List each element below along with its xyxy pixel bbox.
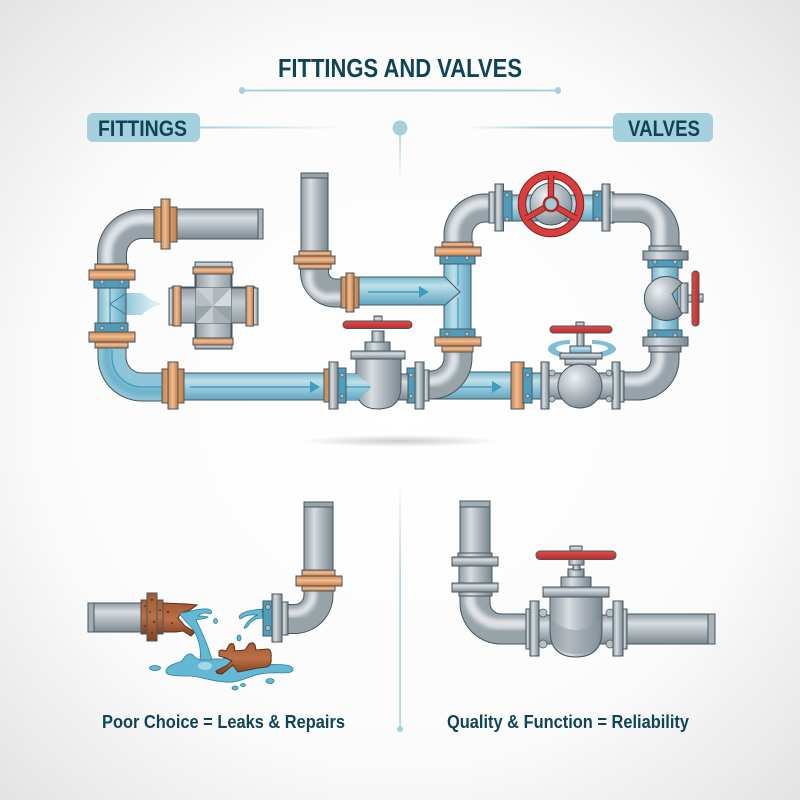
caption: quality and function: Quality & Function = Reliability	[447, 712, 689, 732]
fitting: lower-left blue elbow and pipe with flow arrow	[95, 342, 331, 409]
grey elbow with blue collar	[263, 502, 342, 642]
connector lines and center node	[200, 120, 613, 181]
water jets and falling stream	[180, 609, 263, 660]
main pipe diagram	[89, 173, 703, 409]
heading: fittings: FITTINGS	[98, 116, 187, 141]
illustration: quality valve assembly	[452, 501, 715, 657]
quality elbow	[452, 501, 528, 629]
broken rusty fragment	[216, 643, 271, 674]
illustration: poor choice leaking pipe	[88, 502, 342, 690]
fitting: lower-right elbow	[612, 337, 688, 409]
title underline	[239, 87, 561, 94]
fitting: cross	[169, 262, 258, 349]
valve: right side ball valve with red handle	[644, 267, 703, 337]
fitting: center vertical with elbows	[407, 203, 490, 409]
rusty pipe and broken end	[88, 593, 197, 641]
valve: bottom ball valve with rotation arrows	[548, 322, 616, 408]
fitting: top-left grey elbow and pipe	[107, 199, 263, 268]
fitting: left blue check section with flanges	[89, 264, 163, 342]
fitting: top-right elbow	[612, 203, 688, 268]
vertical divider with end dot	[397, 478, 403, 732]
pipe: lower center blue run with arrow	[424, 362, 549, 409]
fitting: middle grey elbow	[294, 173, 343, 297]
shadow below main diagram	[300, 435, 500, 447]
valve: gate valve with red handle	[324, 316, 412, 409]
caption: poor choice: Poor Choice = Leaks & Repairs	[102, 712, 345, 732]
water puddle	[150, 654, 293, 690]
title: FITTINGS AND VALVES	[278, 53, 522, 83]
valve: top red wheel valve	[489, 175, 614, 233]
heading: valves: VALVES	[628, 116, 700, 141]
quality gate valve	[526, 546, 627, 657]
quality right pipe	[627, 614, 715, 644]
fitting: blue arrow branch	[341, 273, 460, 312]
